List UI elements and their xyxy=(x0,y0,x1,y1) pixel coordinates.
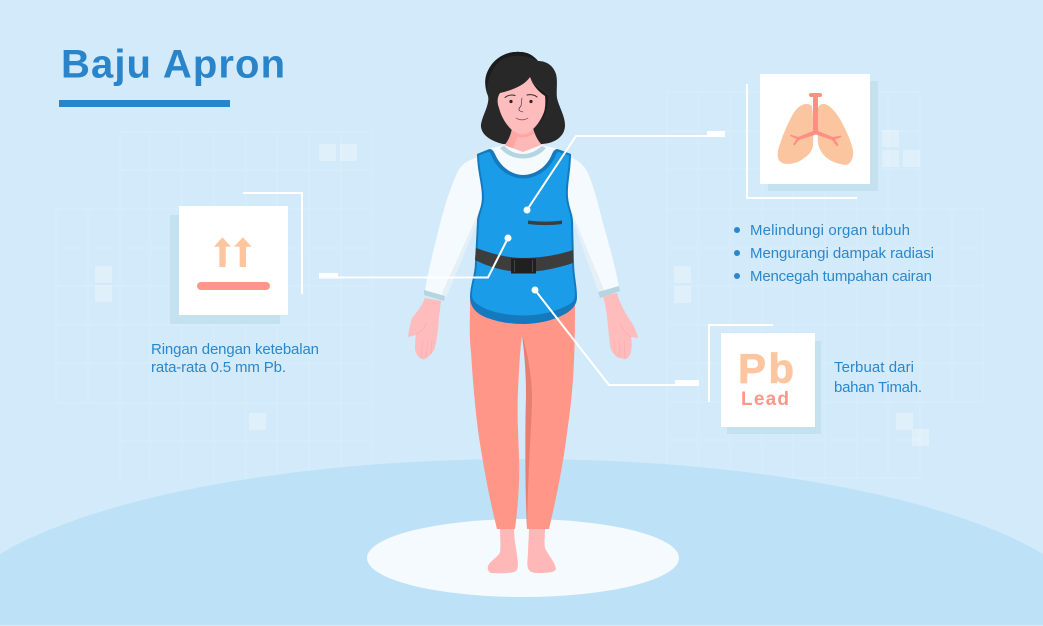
apron vest xyxy=(470,149,577,324)
list: benefits: Mencegah tumpahan cairan xyxy=(750,268,932,285)
title: Baju Apron xyxy=(61,42,285,86)
neck xyxy=(502,128,545,161)
left foot xyxy=(488,529,518,573)
right foot xyxy=(527,529,556,573)
panel: lungs xyxy=(747,74,878,198)
belt xyxy=(475,248,573,272)
label: Lead: Lead xyxy=(741,389,789,410)
floor spot xyxy=(367,519,679,597)
connector: left xyxy=(319,234,512,278)
connector: lower right xyxy=(532,286,699,386)
cuffs xyxy=(424,290,445,301)
apron front panel xyxy=(472,152,575,316)
list: benefits: Melindungi organ tubuh xyxy=(750,222,910,239)
right hand xyxy=(603,293,638,359)
left sleeve xyxy=(425,156,482,296)
icon: lungs xyxy=(778,93,853,165)
left hand xyxy=(408,298,441,359)
text: material description xyxy=(834,359,922,396)
text: material description: Terbuat dari xyxy=(834,359,914,376)
connector: upper right xyxy=(524,131,725,214)
shirt collar area xyxy=(486,145,560,182)
ground xyxy=(0,459,1043,625)
trousers xyxy=(470,300,575,529)
hair xyxy=(481,52,565,144)
title xyxy=(59,42,285,107)
panel: lead xyxy=(709,325,821,434)
right sleeve xyxy=(566,156,619,291)
face xyxy=(498,77,548,133)
panel: light weight xyxy=(170,193,302,324)
belt buckle xyxy=(511,258,536,274)
facial features xyxy=(505,95,537,120)
list: benefits: Mengurangi dampak radiasi xyxy=(750,245,934,262)
icon: Pb symbol: Pb xyxy=(738,345,794,392)
text: weight description: Ringan dengan ketebalan xyxy=(151,341,319,358)
text: weight description xyxy=(151,341,319,376)
text: weight description: rata-rata 0.5 mm Pb. xyxy=(151,359,286,376)
list: benefits xyxy=(734,222,934,285)
text: material description: bahan Timah. xyxy=(834,379,922,396)
icon: arrows and bar xyxy=(197,237,270,290)
figure: woman wearing apron xyxy=(408,52,638,573)
pocket xyxy=(528,220,562,225)
